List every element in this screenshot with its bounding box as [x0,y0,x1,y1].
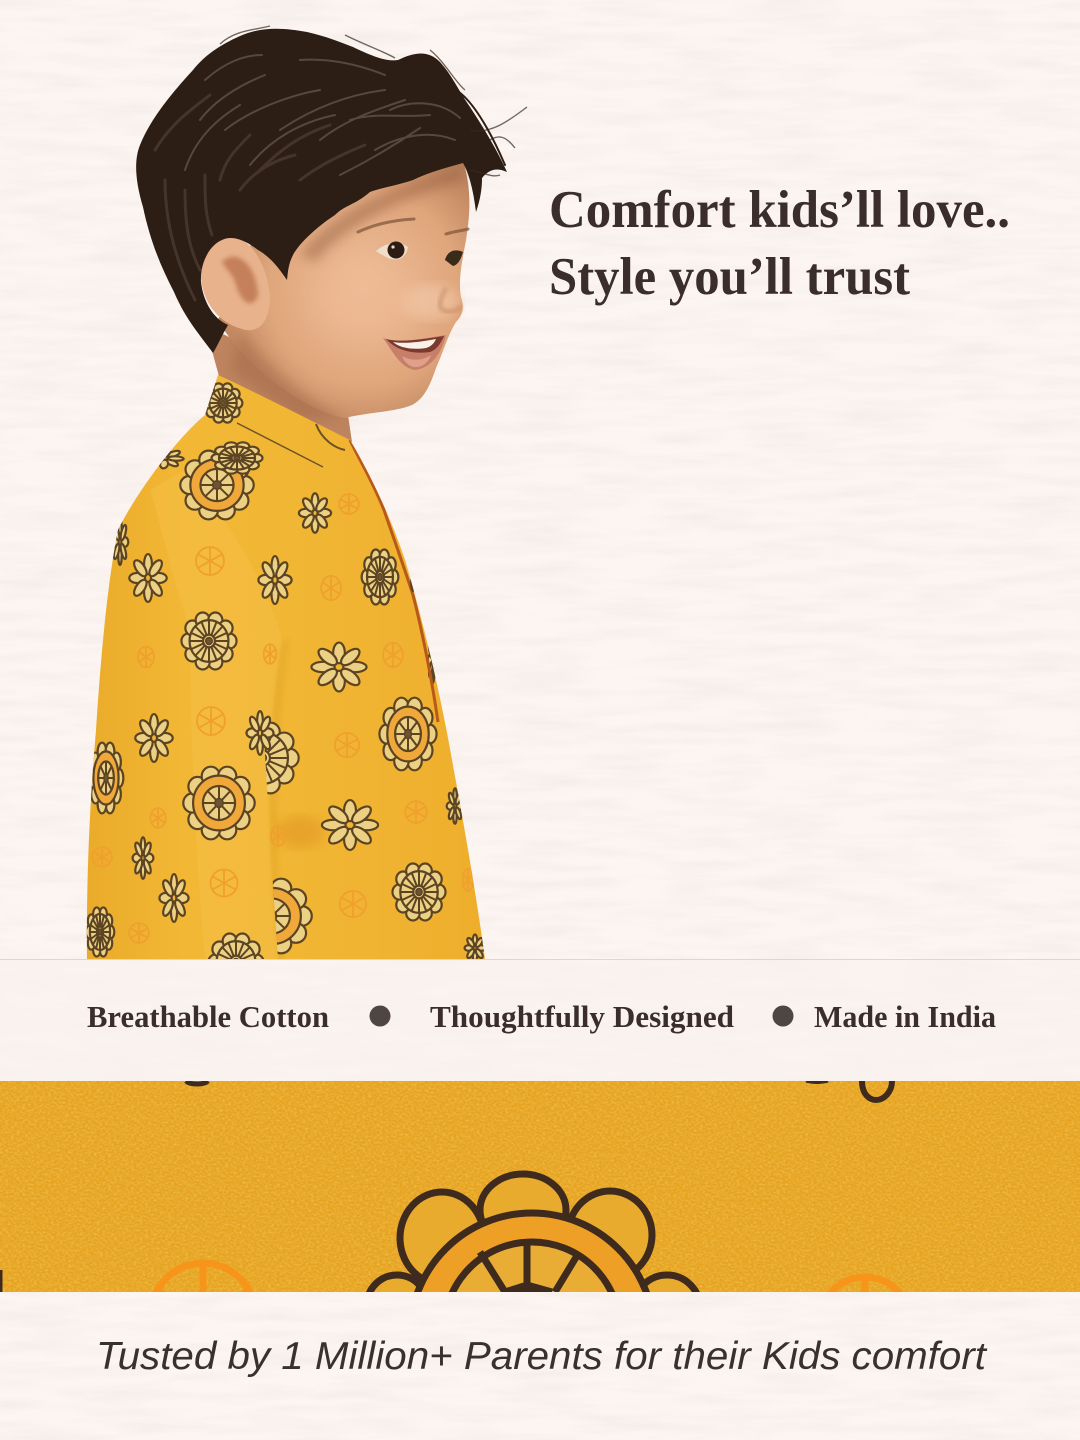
collar stitching [237,423,323,467]
feature: Thoughtfully Designed: Thoughtfully Designed [430,999,734,1034]
separator dot [370,1006,390,1026]
flyaway hair [220,26,527,176]
feature: Made in India: Made in India [814,999,996,1034]
facial features [358,219,468,370]
large flower motif [366,1170,700,1292]
eyes [376,243,408,260]
nose shadow [440,288,462,312]
eyebrows [358,219,414,232]
rosettes [181,613,237,669]
placket [350,440,438,722]
face [218,160,469,420]
headline: Style you’ll trust [549,248,910,306]
hair highlights [155,55,505,300]
headline: Comfort kids’ll love.. [549,181,1010,239]
sleeve shading [150,470,282,959]
photo: smiling boy in yellow kurta [77,26,527,990]
feature strip [0,959,1080,1081]
star flowers [311,643,367,691]
cropped motif fragments [1,1081,892,1292]
motifs cropped by the sleeve seam [264,722,313,954]
collar and kurta [77,375,485,990]
ear [201,238,270,330]
orange mini wheels [196,547,224,575]
neck [205,325,352,442]
fabric close-up band [0,1081,1080,1292]
large wheels [180,451,254,519]
feature: Breathable Cotton: Breathable Cotton [87,999,329,1034]
separator dot [772,1006,794,1026]
trust tagline: Tusted by 1 Million+ Parents for their Kids comfort [96,1335,988,1378]
orange mini motifs [152,1260,903,1292]
headline [549,181,1010,306]
smile [383,335,446,370]
hair [136,26,527,353]
